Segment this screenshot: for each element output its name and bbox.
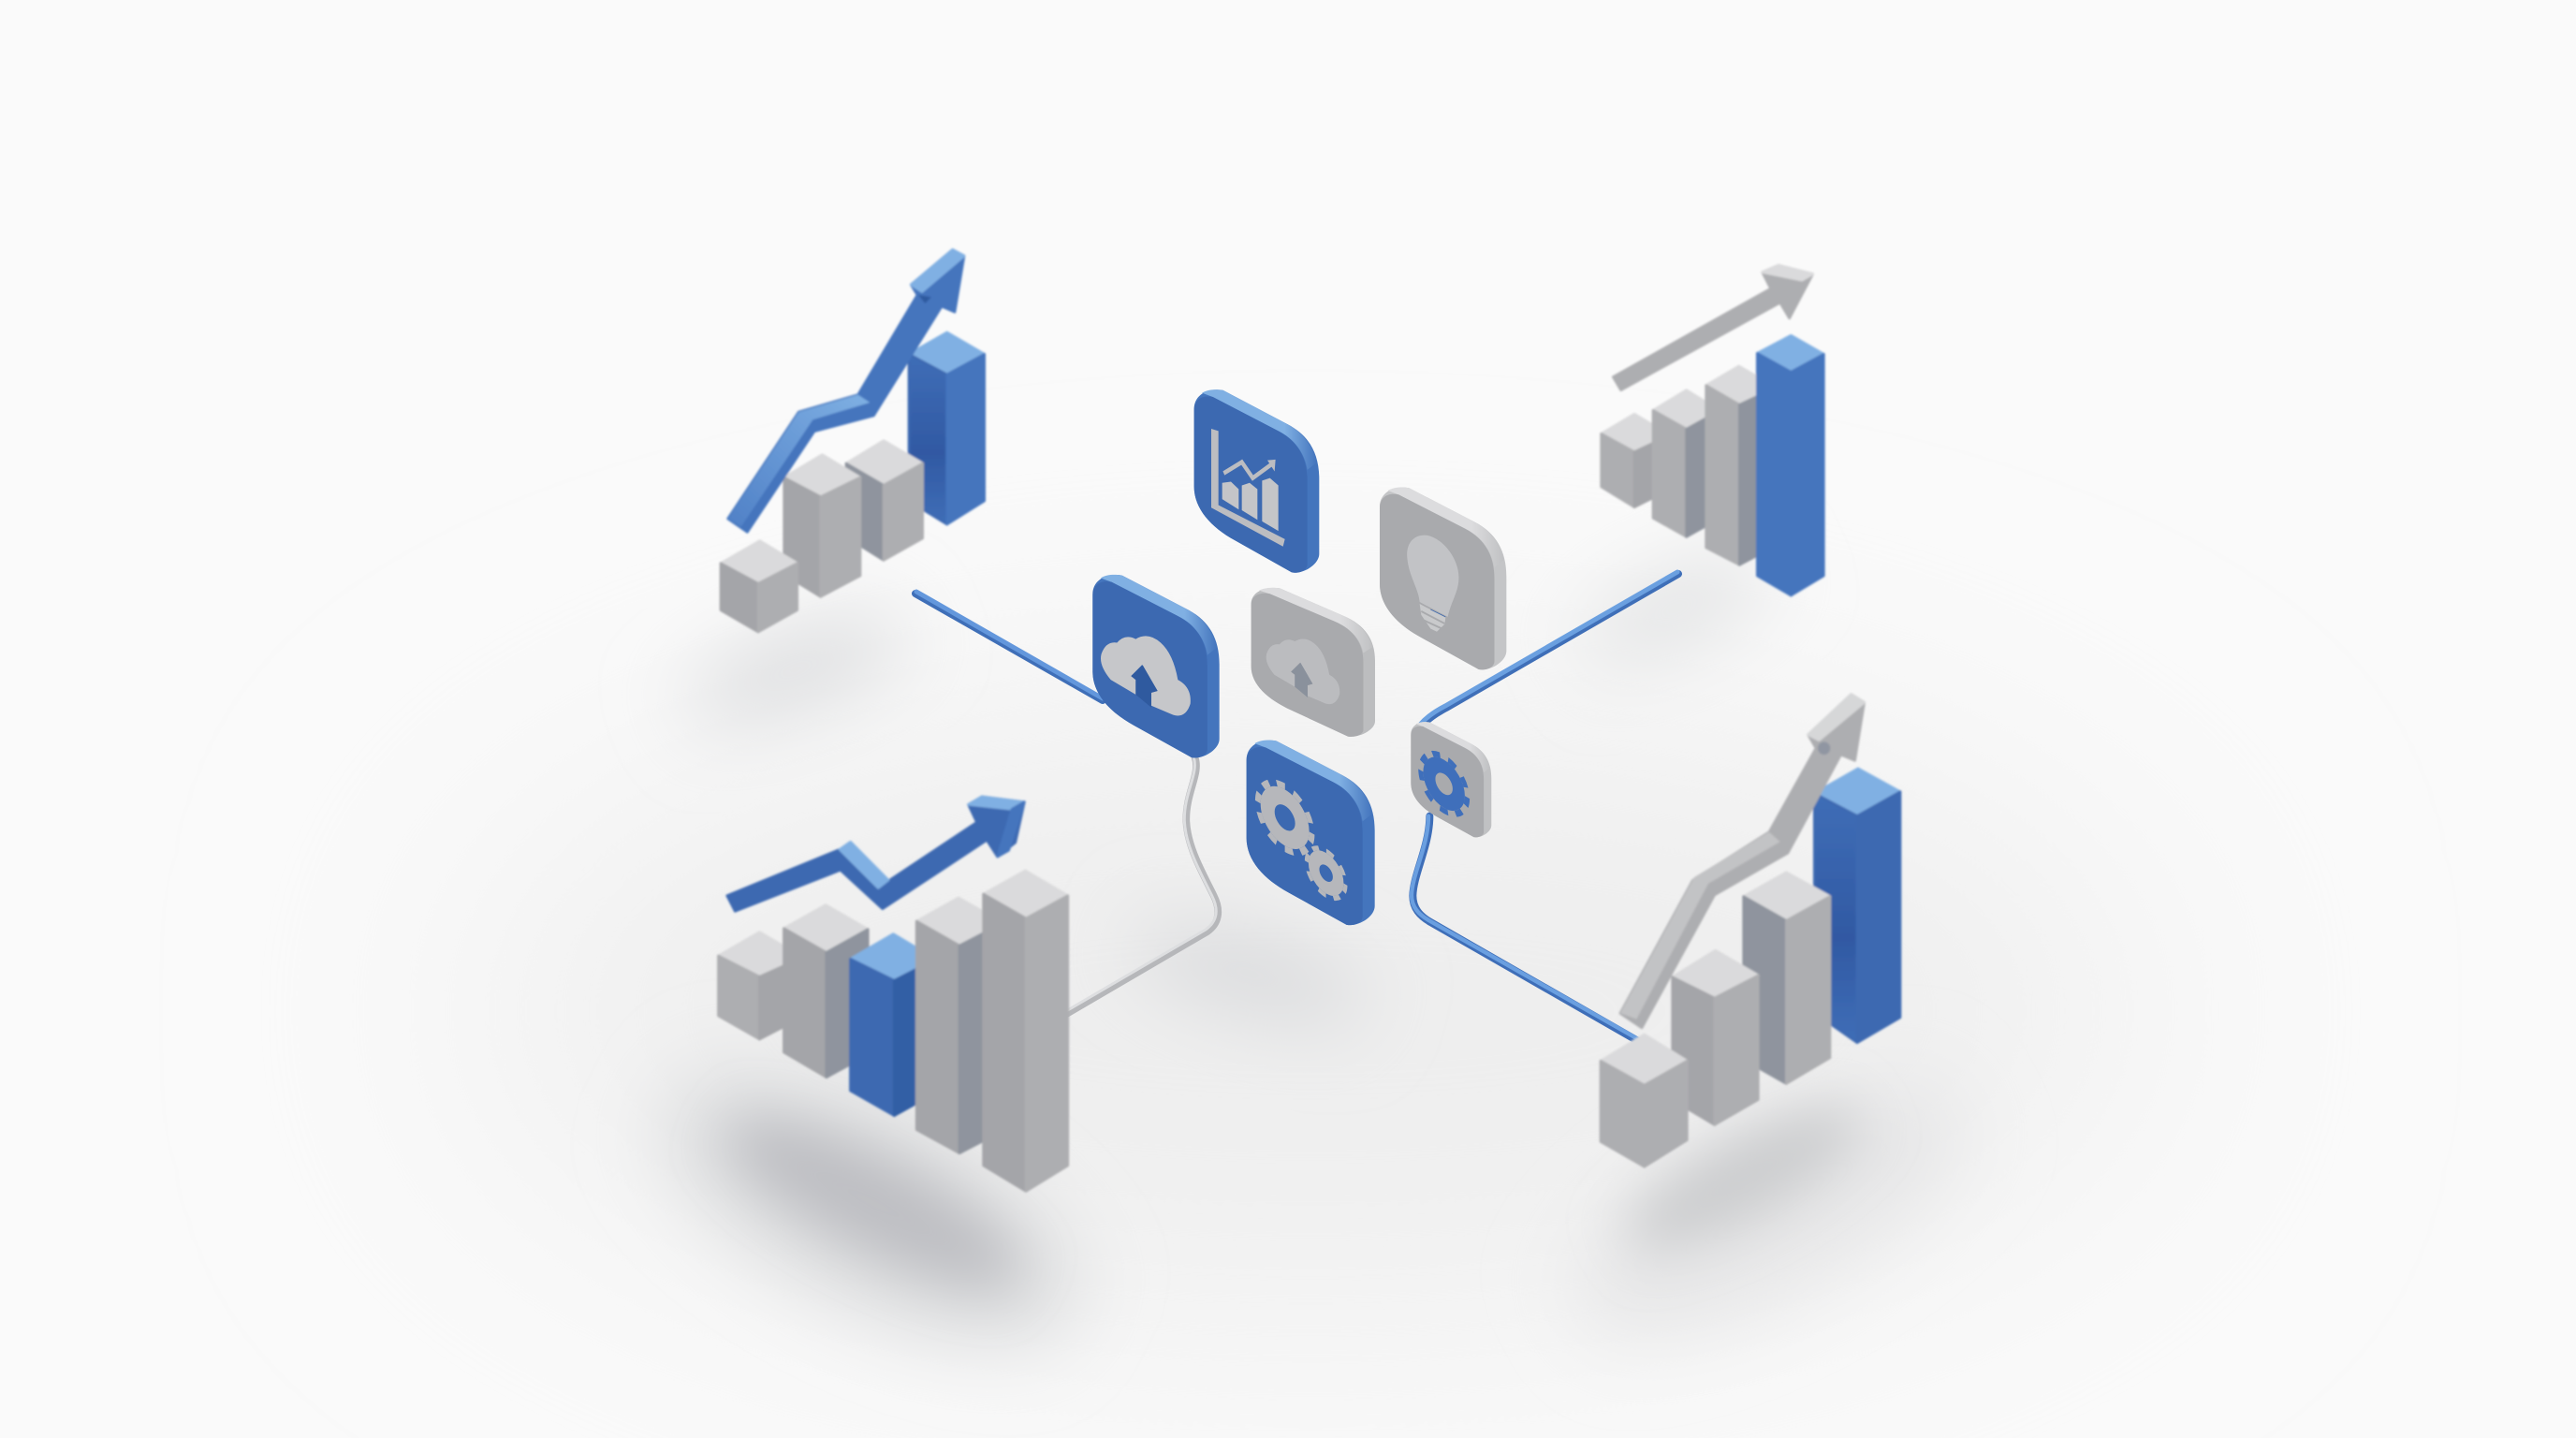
icon tile: blue gears	[1247, 741, 1375, 925]
cable: top-left chart to cloud tile	[915, 592, 1103, 700]
bar: gray cube	[721, 541, 798, 632]
floor shadows	[628, 536, 1998, 1393]
bar: gray 3	[846, 441, 923, 560]
bar: blue tall	[909, 332, 985, 524]
bar: gray 4	[916, 898, 984, 1153]
gears on blue tile	[1258, 770, 1345, 907]
bar: gray cube	[1601, 1034, 1687, 1167]
bar: gray 2	[1653, 390, 1720, 536]
bar: gray 2	[784, 455, 860, 596]
cable: small gear tile to top-right chart	[1415, 572, 1678, 734]
bar: gray 1	[1602, 414, 1668, 507]
bar: gray 2	[1673, 950, 1758, 1124]
icon tile: analytics chart	[1194, 389, 1319, 573]
arrow: blue rising	[728, 250, 964, 532]
icon tile: small gray gear	[1411, 722, 1491, 837]
arrow: gray rising	[1613, 265, 1813, 390]
bar: blue tall	[1757, 335, 1823, 595]
chart: bottom right	[1601, 695, 1900, 1167]
chart: top left	[721, 250, 985, 632]
bar: gray 5 tallest	[984, 871, 1068, 1191]
bar: gray 3	[1744, 873, 1830, 1083]
arrow: gray rising	[1620, 695, 1865, 1028]
blue gear on small tile	[1421, 743, 1467, 824]
cable: small gear tile to bottom-right chart	[1412, 816, 1638, 1041]
icon tile: blue cloud upload	[1092, 575, 1220, 757]
bar: blue tall	[1814, 769, 1900, 1043]
bar: gray 2	[783, 905, 868, 1078]
icon cluster	[1092, 389, 1506, 925]
bar: gray 3	[1706, 366, 1772, 565]
icon tile: gray cloud upload	[1251, 588, 1375, 737]
cable: cloud tile to bottom-left chart	[1067, 757, 1218, 1014]
bar: gray 1	[718, 932, 783, 1039]
icon tile: light bulb	[1380, 488, 1506, 669]
bar: blue middle	[851, 934, 916, 1116]
chart: top right	[1602, 265, 1823, 595]
arrow: blue zigzag	[727, 797, 1024, 911]
chart: bottom left	[718, 797, 1068, 1191]
